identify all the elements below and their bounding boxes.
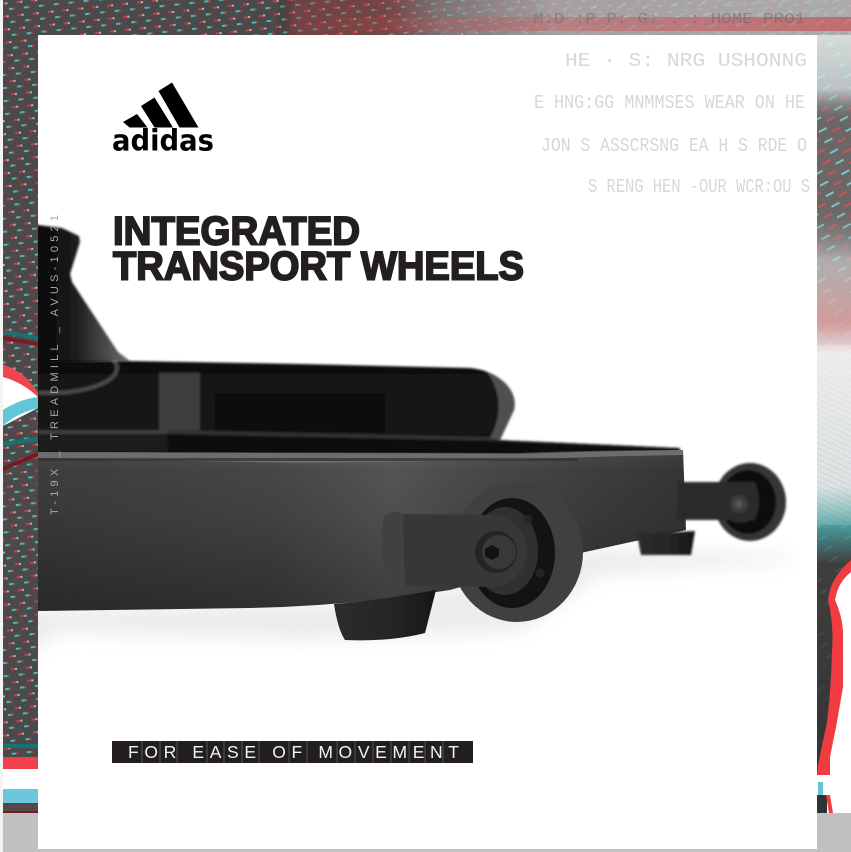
rail top highlight and body [38, 450, 688, 615]
floor shadow [38, 547, 749, 648]
panel: glitch border top [3, 0, 851, 35]
bottom left stripes [3, 757, 38, 852]
bottom grey strip [38, 849, 817, 852]
upper arm [30, 224, 130, 365]
inner back frame [38, 359, 682, 453]
front wheel [382, 482, 583, 622]
icon: three stripes [123, 82, 198, 128]
bracket [403, 514, 486, 587]
title: TRANSPORT WHEELS [113, 244, 524, 288]
top band ghost text: M:D :P P: G: . : HOME PRO1 [533, 11, 805, 28]
vertical product code: T-19X _ TREADMILL _ AVUS-10521 [49, 215, 61, 515]
storage ring [38, 360, 121, 396]
adidas logo [112, 82, 214, 158]
title: INTEGRATED [113, 210, 360, 254]
red white cyan blob [3, 365, 38, 426]
ghost paragraph: JON S ASSCRSNG EA H S RDE O [541, 135, 807, 157]
rear wheel [678, 463, 786, 541]
wordmark: adidas [112, 124, 214, 158]
panel: glitch border left [3, 35, 38, 852]
panel: glitch border right [817, 35, 851, 852]
hex bolt [475, 531, 517, 573]
ghost paragraph: E HNG:GG MNMMSES WEAR ON HE [534, 92, 805, 114]
ghost paragraph: HE · S: NRG USHONNG [565, 50, 807, 72]
rubber foot front [334, 590, 436, 640]
red outlined white shape [817, 560, 851, 775]
ghost paragraph [534, 50, 810, 198]
product: treadmill base with wheels [0, 224, 790, 660]
post [159, 373, 200, 435]
rubber foot rear [637, 531, 695, 555]
tagline bar: FOR EASE OF MOVEMENT [128, 742, 459, 762]
title [113, 210, 524, 288]
